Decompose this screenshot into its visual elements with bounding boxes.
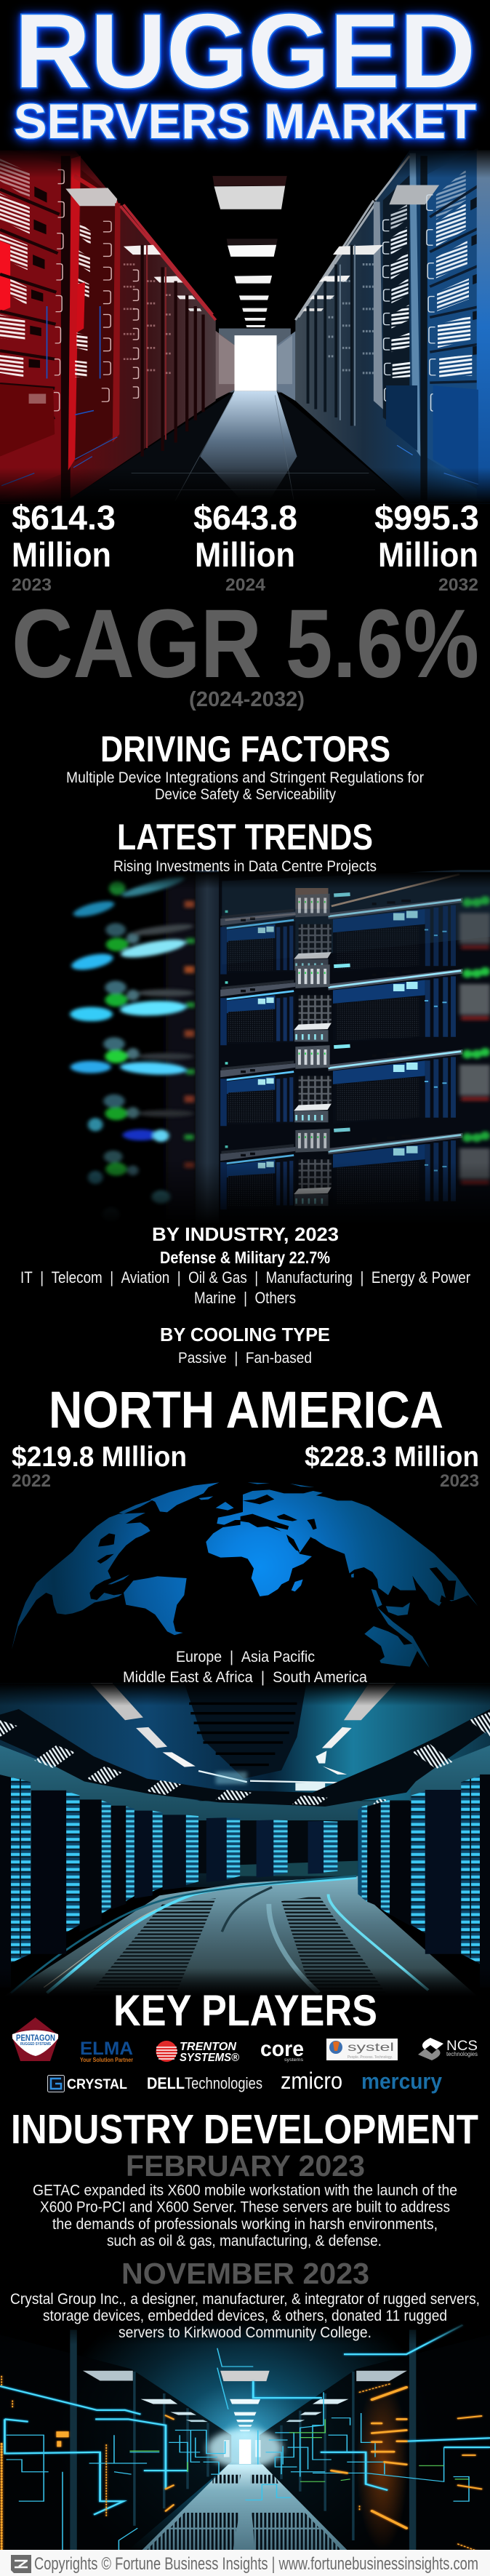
arctic north islands [248,1482,270,1484]
north america 2022 value [12,1441,187,1491]
driving factors heading: DRIVING FACTORS [100,729,390,769]
north america [12,1513,150,1649]
data centre hall photo [0,1684,490,1997]
logo: trenton systems: SYSTEMS® [180,2052,239,2064]
corridor top fade [0,2320,490,2345]
hall bottom fade [0,1968,490,1997]
server unit row D [220,1128,490,1209]
great lakes [97,1554,114,1564]
logo: elma: Your Solution Partner [80,2057,133,2063]
cooling list: Passive | Fan-based [178,1350,312,1367]
industry list: Marine | Others [194,1289,296,1307]
ceiling beam and vents [0,1709,490,1807]
latest trends heading: LATEST TRENDS [117,817,373,857]
southeast asia [371,1589,382,1607]
end-of-aisle glow door [212,329,295,401]
hall back wall [0,1745,490,1887]
logo: elma: ELMA [80,2039,133,2059]
stat 2032: $995.3 [374,498,479,537]
server unit row B [220,964,490,1045]
key players heading: KEY PLAYERS [113,1986,377,2035]
arctic islands [119,1499,155,1514]
february 2023 heading: FEBRUARY 2023 [126,2149,365,2183]
cyan circuit traces, bright [0,2325,490,2515]
logo: dell technologies [147,2074,262,2092]
globe map [12,1482,478,1668]
africa west [206,1524,249,1558]
glowing circuit corridor photo [0,2320,490,2553]
stat 2023: $614.3 [12,498,116,537]
driving factors text: Multiple Device Integrations and Stringent Regulations for [66,769,424,786]
logo: systel: systel [348,2041,394,2054]
hero photo: red and blue server corridor [0,148,490,504]
server unit row C [220,1044,490,1126]
footer logo icon [11,2555,31,2573]
ceiling lights [212,176,287,327]
persian gulf [310,1537,325,1547]
top unit [222,870,490,964]
logo: dell technologies: DELL [147,2074,185,2092]
logo: dell technologies: Technologies [185,2074,262,2092]
stat 2024: Million [195,535,295,574]
blurred foreground rack [70,873,197,1223]
north america 2023 value: 2023 [440,1471,479,1491]
stat 2024 [193,498,297,595]
industry list [20,1268,470,1307]
mediterranean sea [241,1514,289,1529]
february 2023 text: X600 Pro-PCI and X600 Server. These servers are built to address [40,2199,450,2215]
key player logos [12,2017,478,2094]
logo: ncs technologies: technologies [446,2051,478,2057]
november 2023 text: servers to Kirkwood Community College. [119,2324,371,2341]
logo: pentagon [12,2017,59,2061]
title line: servers market: SERVERS MARKET [14,94,476,149]
other regions list: Europe | Asia Pacific [176,1649,315,1665]
february 2023 text [33,2182,457,2249]
driving factors text: Device Safety & Serviceability [155,786,336,803]
north america heading: NORTH AMERICA [49,1382,443,1439]
february 2023 text: the demands of professionals working in harsh environments, [52,2216,438,2233]
other regions list: Middle East & Africa | South America [123,1669,367,1686]
server unit row A [220,892,490,975]
latest trends text: Rising Investments in Data Centre Projects [113,858,377,875]
february 2023 text: such as oil & gas, manufacturing, & defense. [107,2233,382,2249]
floor curved rails [11,1876,428,1993]
logo: pentagon: RUGGED SYSTEMS [20,2042,52,2047]
by cooling heading: BY COOLING TYPE [160,1324,330,1345]
stat 2023: Million [12,535,111,574]
logo: systel: People. Process. Technology. [348,2055,393,2060]
corridor glow background [0,2320,490,2553]
november 2023 text: storage devices, embedded devices, & others, donated 11 rugged [43,2308,447,2324]
hall ceiling [0,1684,490,1801]
stat 2032 [374,498,479,595]
hall floor [4,1876,477,1996]
australia [364,1626,417,1667]
logo: ncs technologies: NCS [446,2039,478,2054]
logo: core systems: systems [284,2057,304,2063]
left red racks [0,151,216,504]
south america [124,1576,187,1635]
stat 2023 [12,498,116,595]
ceiling lights [83,2371,407,2431]
rack post [196,870,219,1223]
secondary bright columns [227,2440,258,2457]
eurasia [243,1489,478,1606]
stat 2024: 2024 [225,575,266,595]
by industry heading: BY INDUSTRY, 2023 [152,1223,339,1245]
green circuit traces [129,2419,469,2481]
iceland region [198,1496,213,1500]
black sea [277,1514,297,1521]
footer bar [0,2550,490,2576]
logo: trenton systems [156,2041,239,2064]
cyan circuit traces, thin [7,2348,469,2551]
stat 2023: 2023 [12,575,52,595]
logo: crystal group [48,2076,127,2092]
floor light reflection [200,391,297,501]
driving factors text [66,769,424,803]
rack photo fade [0,1162,490,1225]
orange server lights [1,2376,481,2551]
north america 2022 value: 2022 [12,1471,51,1491]
dark reflective floor [63,391,409,504]
logo: zmicro: zmicro [281,2068,342,2094]
greenland [150,1482,220,1512]
stat 2032: 2032 [438,575,478,595]
red sea [286,1535,300,1551]
leading segment: Defense & Military 22.7% [160,1248,330,1267]
aisle vanishing glow [207,2429,282,2468]
february 2023 text: GETAC expanded its X600 mobile workstation with the launch of the [33,2182,457,2199]
corridor floor [141,2465,348,2551]
sri lanka [351,1573,354,1577]
stat 2032: Million [378,535,478,574]
server rack photo [0,870,490,1225]
side server walls [0,2329,490,2553]
sea of japan [430,1567,456,1600]
britain [216,1502,234,1511]
caribbean islands [108,1575,129,1584]
madagascar [292,1580,303,1591]
north america 2023 value: $228.3 Million [305,1441,479,1473]
logo: pentagon: PENTAGON [16,2034,55,2043]
stat 2024: $643.8 [193,498,297,537]
background rack body [219,873,490,1223]
north america 2023 value [305,1441,479,1491]
hero top fade [0,148,490,178]
hall top fade [0,1684,490,1705]
november 2023 heading: NOVEMBER 2023 [121,2257,369,2290]
bright aisle centre [239,2439,251,2464]
hero bottom fade [0,468,490,504]
right server towers [358,1775,490,1988]
western hemisphere landmasses [12,1482,249,1649]
title [14,0,476,149]
north america 2022 value: $219.8 MIllion [12,1441,187,1473]
market stats [12,498,479,595]
CAGR period: (2024-2032) [189,688,305,711]
hudson bay [98,1533,115,1547]
logo: ncs technologies [418,2038,478,2060]
other regions list [123,1649,367,1686]
caspian sea [307,1519,317,1529]
eastern hemisphere landmasses [241,1482,478,1668]
africa east [241,1520,312,1596]
logo: core systems: core [260,2037,304,2061]
logo: trenton systems: TRENTON [180,2041,236,2053]
logo: mercury: mercury [361,2068,443,2094]
western europe [217,1511,249,1525]
logo: systel [326,2039,398,2060]
november 2023 text [10,2291,480,2341]
rack photo top fade [0,872,490,889]
logo: crystal group: CRYSTAL [67,2077,127,2092]
baltic sea [243,1495,274,1504]
left server towers [0,1775,337,1988]
right blue racks [295,148,490,504]
